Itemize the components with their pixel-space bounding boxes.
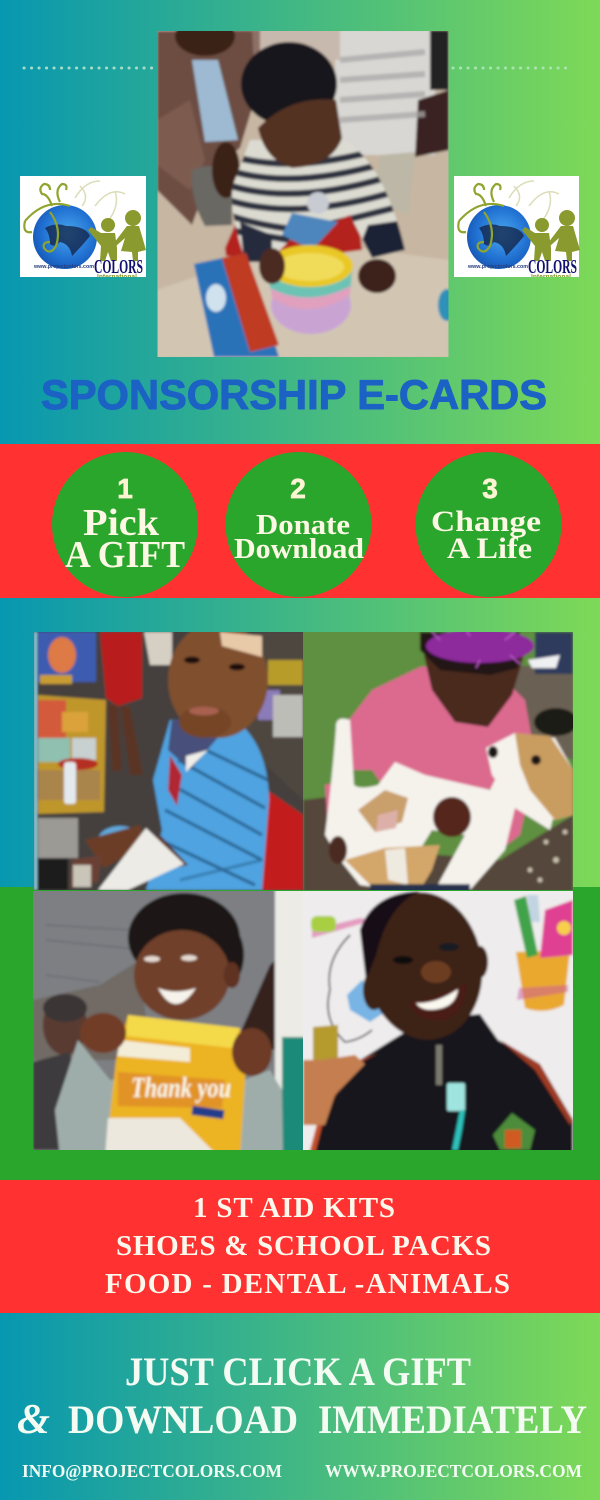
stacked bowls xyxy=(270,296,352,335)
logo: right xyxy=(454,176,580,281)
head xyxy=(168,622,268,738)
icon: swirls xyxy=(458,181,559,252)
red cushion xyxy=(258,785,303,890)
gift line 3: FOOD - DENTAL -ANIMALS xyxy=(105,1268,510,1300)
head and tinsel xyxy=(424,655,524,727)
icon: children holding hands xyxy=(522,210,580,261)
logo text: www.projectcolors.com xyxy=(467,264,528,270)
contact: website: WWW.PROJECTCOLORS.COM xyxy=(325,1461,582,1481)
step 3: 3 xyxy=(482,473,498,504)
call to action xyxy=(17,1349,587,1443)
icon: children holding hands xyxy=(88,210,146,261)
hands xyxy=(80,1013,126,1053)
arm and bandage xyxy=(158,834,189,868)
photo: smiling boy with toothbrush xyxy=(303,891,573,1150)
adult figure xyxy=(157,16,256,226)
logo text xyxy=(468,260,576,277)
panel: gift list xyxy=(0,1180,600,1313)
red trousers xyxy=(225,212,362,258)
zip and toothbrush xyxy=(436,1045,442,1085)
shirt xyxy=(144,718,272,890)
photo: boy with bandage xyxy=(34,632,303,890)
call to action: JUST CLICK A GIFT xyxy=(125,1349,471,1394)
sweater badge xyxy=(493,1113,535,1150)
puppy xyxy=(325,719,560,890)
step 1: 1 xyxy=(117,473,133,504)
logo text xyxy=(34,260,142,277)
food packet xyxy=(105,1015,246,1158)
step 2: Download xyxy=(234,534,364,565)
small child xyxy=(33,994,87,1150)
child head xyxy=(241,42,337,126)
contact: email: INFO@PROJECTCOLORS.COM xyxy=(22,1461,282,1481)
step 2: 2 xyxy=(290,473,306,504)
sweater xyxy=(55,1040,283,1158)
sweater xyxy=(348,664,533,790)
step 1: Pick xyxy=(83,502,160,544)
step 3: Change xyxy=(431,505,541,538)
gift line 1: 1 ST AID KITS xyxy=(193,1192,395,1224)
panel: three steps xyxy=(0,444,600,598)
head xyxy=(363,970,385,1010)
icon: swirls xyxy=(24,181,125,252)
step 1 xyxy=(52,452,198,597)
step 1: A GIFT xyxy=(65,534,185,576)
door handle xyxy=(313,1025,338,1068)
dotted line: right xyxy=(453,66,568,70)
logo text: International xyxy=(97,274,137,281)
photo: girl holding thank-you food packet xyxy=(33,891,303,1150)
gift line 2: SHOES & SCHOOL PACKS xyxy=(116,1230,491,1262)
card and tag xyxy=(282,213,338,250)
hands xyxy=(433,797,471,837)
sweater xyxy=(311,1014,573,1158)
hand xyxy=(303,1055,365,1125)
icon: globe xyxy=(33,205,97,269)
dotted line: left xyxy=(24,66,157,70)
cartoon toothbrush xyxy=(312,918,374,938)
call to action: DOWNLOAD xyxy=(68,1397,298,1442)
head and hair xyxy=(126,892,241,962)
toothpaste box xyxy=(194,253,279,357)
photo: child holding puppy xyxy=(303,632,573,890)
panel: green band behind lower photos xyxy=(0,887,600,1180)
photo: girl holding thank-you food packet: Thank you xyxy=(131,1073,231,1104)
step 3 xyxy=(416,452,562,597)
shorts xyxy=(98,824,132,838)
striped top xyxy=(230,138,406,264)
logo text: International xyxy=(531,274,571,281)
photo: toddler with bowls and toothpaste xyxy=(158,31,448,357)
step 3: A Life xyxy=(447,532,532,565)
logo text: COLORS xyxy=(94,256,143,278)
title: SPONSORSHIP E-CARDS xyxy=(41,371,547,418)
cartoon figure outline xyxy=(328,935,372,1042)
cup, brush and paste xyxy=(516,950,570,1011)
hands xyxy=(259,248,285,284)
step 2: Donate xyxy=(256,510,350,541)
logo text: www.projectcolors.com xyxy=(33,264,94,270)
icon: globe xyxy=(467,205,531,269)
call to action: & xyxy=(17,1397,50,1443)
logo: left xyxy=(20,176,146,281)
step 2 xyxy=(226,452,372,597)
